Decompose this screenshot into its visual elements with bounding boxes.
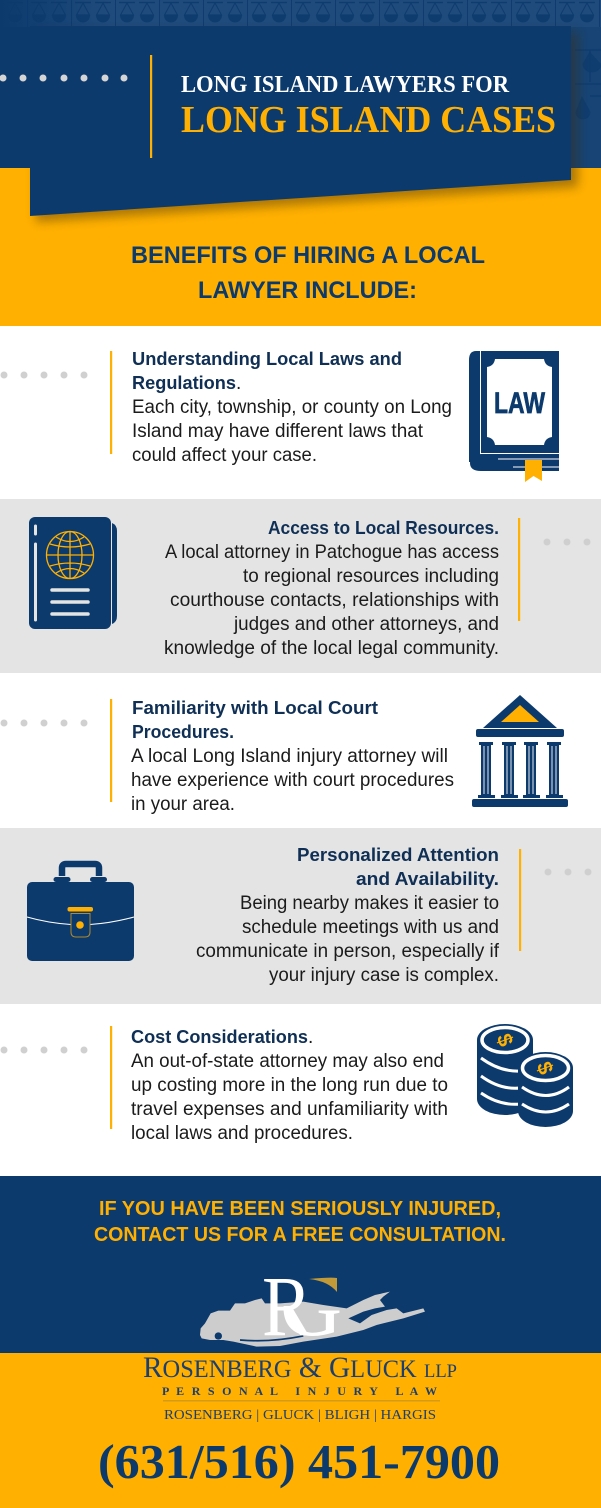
- icon: coin stacks: $: [532, 1059, 557, 1078]
- text block: Island may have different laws that: [132, 421, 424, 442]
- text block: [196, 844, 500, 986]
- dots: [0, 720, 88, 726]
- text block: Understanding Local Laws and: [132, 348, 402, 369]
- text block: An out-of-state attorney may also end: [131, 1051, 444, 1072]
- heading: LAWYER INCLUDE:: [198, 277, 417, 304]
- icon: courthouse: [472, 695, 568, 807]
- text block: judges and other attorneys, and: [233, 614, 499, 635]
- icon: coin stacks: $: [492, 1031, 517, 1050]
- text block: Cost Considerations: [131, 1026, 308, 1047]
- divider: [519, 849, 521, 951]
- dots: [544, 868, 592, 876]
- divider: [110, 1026, 112, 1129]
- divider: [110, 699, 112, 802]
- heading: [131, 242, 485, 304]
- logo: island map with monogram: G: [280, 1258, 342, 1354]
- text block: to regional resources including: [243, 566, 499, 587]
- header divider: [150, 55, 152, 158]
- panel: personalized attention: [0, 828, 601, 1004]
- header panel: [30, 26, 571, 216]
- icon: law book: LAW: [494, 387, 546, 420]
- dots: [544, 538, 590, 546]
- text block: Procedures.: [132, 721, 234, 742]
- text block: and Availability.: [356, 868, 499, 889]
- icon: briefcase: [27, 864, 134, 961]
- partner names: ROSENBERG | GLUCK | BLIGH | HARGIS: [164, 1408, 436, 1423]
- text block: [132, 348, 452, 466]
- title: LONG ISLAND CASES: [181, 99, 556, 141]
- logo: island map with monogram: R: [262, 1258, 313, 1354]
- callout text: IF YOU HAVE BEEN SERIOUSLY INJURED,: [99, 1197, 501, 1220]
- title: [181, 71, 556, 141]
- text block: up costing more in the long run due to: [131, 1075, 448, 1096]
- callout text: CONTACT US FOR A FREE CONSULTATION.: [94, 1223, 506, 1246]
- icon: law book: [469, 351, 559, 482]
- text block: local laws and procedures.: [131, 1123, 353, 1144]
- dots: [0, 372, 88, 378]
- text block: knowledge of the local legal community.: [164, 638, 499, 659]
- callout text: [94, 1197, 506, 1246]
- text block: have experience with court procedures: [131, 770, 454, 791]
- text block: communicate in person, especially if: [196, 941, 500, 962]
- text block: [131, 1026, 448, 1144]
- text block: Each city, township, or county on Long: [132, 397, 452, 418]
- firm name: ROSENBERG & GLUCK LLP: [143, 1351, 457, 1384]
- icon: passport: [29, 517, 117, 629]
- rule: [163, 1400, 440, 1402]
- text block: Access to Local Resources.: [268, 517, 499, 538]
- text block: .: [308, 1027, 313, 1048]
- header panel shadow: [36, 32, 578, 222]
- panel: local laws: [0, 326, 601, 499]
- title: LONG ISLAND LAWYERS FOR: [181, 71, 509, 98]
- text block: courthouse contacts, relationships with: [170, 590, 499, 611]
- panel: local resources: [0, 499, 601, 673]
- divider: [110, 351, 112, 454]
- text block: Personalized Attention: [297, 844, 499, 865]
- heading: BENEFITS OF HIRING A LOCAL: [131, 242, 485, 269]
- text block: your injury case is complex.: [269, 965, 499, 986]
- text block: travel expenses and unfamiliarity with: [131, 1099, 448, 1120]
- text block: could affect your case.: [132, 445, 317, 466]
- text block: in your area.: [131, 794, 235, 815]
- text block: [131, 697, 454, 815]
- tagline: P E R S O N A L I N J U R Y L A W: [162, 1384, 437, 1398]
- panel: call to action: [0, 1176, 601, 1354]
- text block: [164, 517, 499, 659]
- text block: schedule meetings with us and: [242, 917, 499, 938]
- header background: [0, 0, 601, 326]
- dots: [0, 1046, 88, 1054]
- divider: [518, 518, 520, 621]
- text block: Familiarity with Local Court: [132, 697, 378, 718]
- logo: island map with monogram: [200, 1278, 425, 1347]
- panel: firm footer: [0, 1351, 601, 1508]
- text block: Regulations: [132, 372, 236, 393]
- text block: A local Long Island injury attorney will: [131, 746, 448, 767]
- icon: coin stacks: [477, 1024, 573, 1127]
- phone number: (631/516) 451-7900: [98, 1434, 500, 1489]
- text block: A local attorney in Patchogue has access: [165, 542, 499, 563]
- text block: Being nearby makes it easier to: [240, 893, 499, 914]
- header dots: [0, 74, 128, 82]
- panel: cost considerations: [0, 1004, 601, 1176]
- panel: court procedures: [0, 673, 601, 828]
- text block: .: [236, 373, 241, 394]
